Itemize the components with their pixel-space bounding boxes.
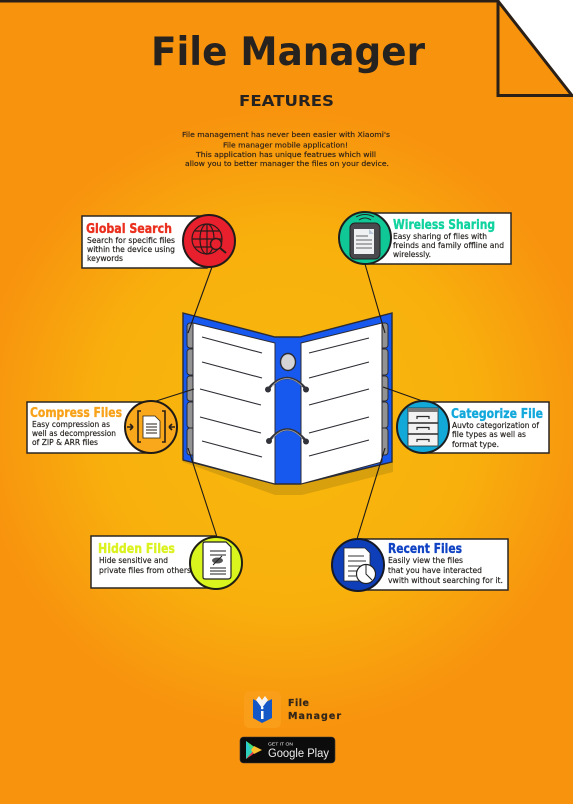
description: of ZIP & ARR files	[32, 438, 98, 447]
intro text	[182, 130, 390, 168]
icon: document with clock	[332, 539, 384, 591]
description	[393, 232, 504, 259]
panel: compress files	[27, 401, 177, 453]
right page	[301, 323, 382, 484]
heading: Recent Files	[388, 542, 462, 557]
description	[87, 236, 175, 263]
label box	[360, 539, 508, 590]
google play badge: Google Play	[268, 748, 329, 760]
description: vwith without searching for it.	[388, 576, 503, 585]
description: well as decompression	[32, 429, 116, 438]
icon: compress document	[125, 401, 177, 453]
panel: hidden files	[91, 536, 242, 589]
folded page corner	[0, 1, 573, 96]
heading: Wireless Sharing	[393, 218, 495, 233]
book shadow	[183, 460, 393, 495]
blue binder cover	[183, 313, 392, 484]
index tabs	[187, 323, 388, 455]
title: File Manager	[151, 30, 426, 75]
description: Easy sharing of files with	[393, 232, 487, 241]
heading: Categorize File	[451, 407, 543, 422]
app name: File	[288, 698, 309, 709]
icon: play triangle	[246, 741, 262, 759]
heading: Hidden Files	[98, 542, 175, 557]
app name: Manager	[288, 711, 341, 722]
description: Easily view the files	[388, 556, 463, 565]
panel: wireless sharing	[339, 212, 511, 264]
description: that you have interacted	[388, 566, 482, 575]
icon: phone with document	[339, 212, 391, 264]
label box	[91, 536, 216, 588]
icon: hidden document	[190, 537, 242, 589]
description: freinds and family offline and	[393, 241, 504, 250]
intro text: This application has unique featrues which will	[195, 150, 376, 159]
spine hole	[280, 354, 296, 370]
connector lines	[153, 264, 428, 539]
description: Search for specific files	[87, 236, 175, 245]
description: wirelessly.	[393, 250, 431, 259]
google play badge: GET IT ON	[268, 742, 294, 748]
intro text: allow you to better manager the files on your device.	[185, 159, 389, 168]
icon: globe with magnifier	[183, 215, 235, 267]
label box	[425, 402, 549, 453]
description	[388, 556, 503, 585]
binder rings	[265, 378, 309, 444]
subtitle: FEATURES	[239, 92, 334, 110]
description: within the device using	[87, 245, 175, 254]
intro text: File management has never been easier with Xiaomi's	[182, 130, 390, 139]
left page	[193, 323, 275, 484]
description	[452, 421, 539, 449]
description	[99, 556, 191, 575]
description: file types as well as	[452, 430, 526, 439]
icon: filing cabinet	[397, 401, 449, 453]
google play badge	[240, 737, 335, 763]
panel: categorize file	[397, 401, 549, 453]
description: format type.	[452, 440, 499, 449]
book illustration	[183, 313, 393, 495]
intro text: File manager mobile application!	[223, 140, 348, 150]
label box	[27, 402, 151, 453]
panel: global search	[82, 215, 235, 268]
label box	[82, 216, 207, 268]
page text lines	[200, 337, 369, 457]
panel: recent files	[332, 539, 508, 591]
app name	[288, 698, 341, 722]
description: keywords	[87, 254, 123, 263]
description: Easy compression as	[32, 420, 110, 429]
heading: Global Search	[86, 222, 172, 237]
description: Auvto categorization of	[452, 421, 539, 430]
app logo	[244, 691, 281, 728]
description	[32, 420, 116, 447]
description: private files from others	[99, 566, 191, 575]
description: Hide sensitive and	[99, 556, 168, 565]
heading: Compress Files	[30, 406, 122, 421]
label box	[367, 213, 511, 264]
